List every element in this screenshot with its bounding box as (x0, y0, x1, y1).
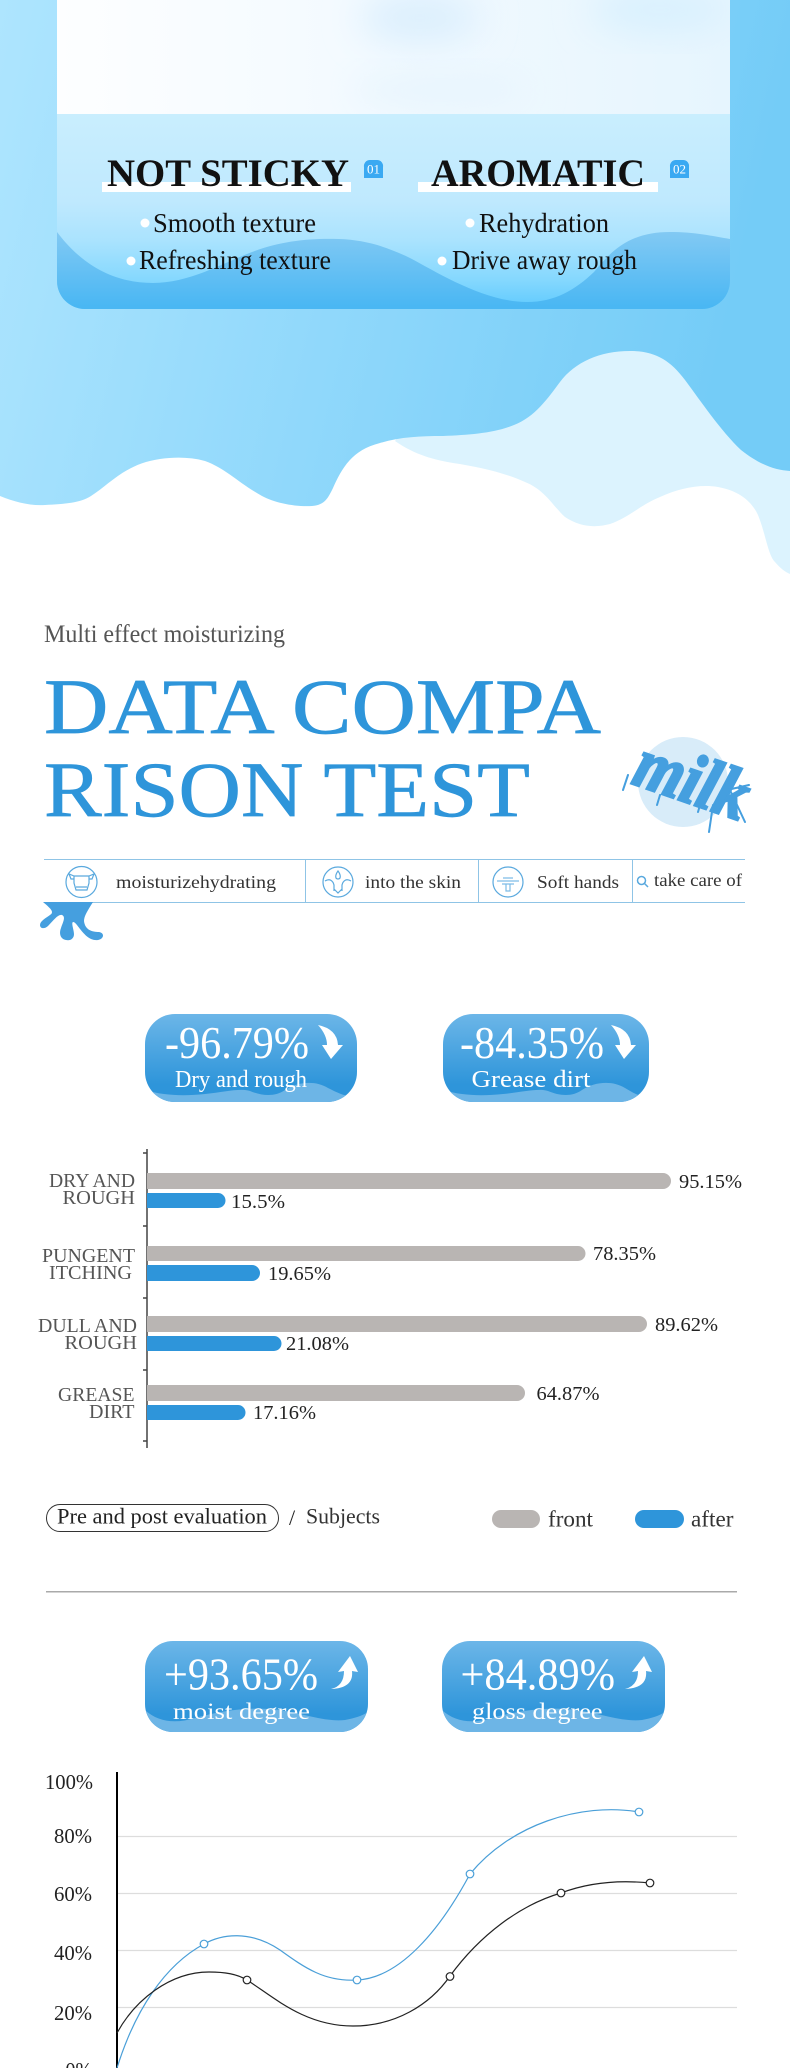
stat pill: grease dirt: Grease dirt (472, 1067, 591, 1093)
badge 01 (364, 160, 383, 178)
stat pill: moist degree (145, 1641, 368, 1732)
icon: cow (66, 866, 97, 898)
arrow down (611, 1025, 636, 1059)
label: moisturize: moisturizehydrating (116, 872, 276, 892)
product card (57, 0, 730, 309)
y axis (116, 1772, 118, 2068)
group: dull and rough: DULL AND (38, 1315, 137, 1337)
group: dry and rough: 95.15% (679, 1171, 742, 1193)
axis (143, 1149, 147, 1448)
list: aromatic benefits (438, 208, 637, 275)
icon: skin drop (323, 867, 353, 897)
stat pill: moist degree: +93.65% (164, 1650, 318, 1700)
legend (492, 1506, 734, 1532)
y labels: 20% (54, 2001, 92, 2025)
bar chart (38, 1149, 742, 1448)
badge 02: 02 (673, 162, 686, 176)
section subtitle: Multi effect moisturizing (44, 621, 285, 648)
group: pungent itching: PUNGENT (42, 1245, 135, 1267)
group: pungent itching (42, 1243, 656, 1285)
stat pill: gloss degree: gloss degree (472, 1699, 602, 1724)
evaluation label: / (289, 1505, 296, 1530)
heading: aromatic: AROMATIC (431, 152, 645, 195)
stat pill: gloss degree: +84.89% (460, 1650, 615, 1700)
stat pill: dry and rough (145, 1014, 357, 1102)
stat pill: moist degree: moist degree (173, 1699, 310, 1724)
group: dry and rough: DRY AND (49, 1170, 135, 1192)
milk splash (40, 902, 103, 940)
group: dry and rough: ROUGH (62, 1187, 135, 1209)
section title: DATA COMPA (44, 663, 601, 750)
list: not sticky benefits (126, 208, 331, 275)
group: pungent itching: 19.65% (268, 1263, 331, 1285)
stat pill: gloss degree (442, 1641, 665, 1732)
group: dull and rough (38, 1314, 718, 1355)
y labels: 80% (54, 1824, 92, 1848)
group: grease dirt: GREASE (58, 1384, 134, 1406)
card waves (57, 232, 730, 309)
group: grease dirt: 64.87% (536, 1383, 600, 1405)
group: grease dirt (58, 1383, 600, 1424)
card lower panel (57, 114, 730, 309)
feature strip (44, 859, 745, 902)
y labels: 60% (54, 1882, 92, 1906)
arrow down (318, 1025, 343, 1059)
arrow up (625, 1656, 652, 1689)
section title (44, 663, 601, 833)
label: take care of: take care of (654, 870, 742, 890)
badge 01: 01 (367, 162, 380, 176)
list: not sticky benefits: Smooth texture (153, 208, 316, 238)
list: aromatic benefits: Drive away rough (452, 245, 637, 275)
arrow up (331, 1656, 358, 1689)
list: not sticky benefits: Refreshing texture (139, 245, 331, 275)
section title: RISON TEST (44, 746, 530, 833)
line chart (45, 1770, 737, 2068)
list: aromatic benefits: Rehydration (479, 208, 609, 238)
card photo area (57, 0, 730, 114)
y labels: 100% (45, 1770, 93, 1794)
badge 02 (670, 160, 689, 178)
group: pungent itching: ITCHING (49, 1262, 132, 1284)
evaluation label (46, 1504, 380, 1532)
pale wave behind header (395, 300, 790, 574)
y labels (45, 1770, 93, 2068)
stat pill: grease dirt (443, 1014, 649, 1102)
heading: not sticky: NOT STICKY (107, 152, 349, 195)
stat pill: grease dirt: -84.35% (460, 1017, 604, 1068)
series: after (117, 1808, 643, 2068)
stat pill: dry and rough: Dry and rough (175, 1067, 307, 1093)
icon: search (638, 876, 648, 887)
icon: hands (493, 867, 523, 897)
group: dry and rough: 15.5% (231, 1191, 285, 1213)
stat pill: dry and rough: -96.79% (165, 1017, 309, 1068)
legend: after (691, 1506, 734, 1532)
evaluation label: Pre and post evaluation (57, 1504, 267, 1528)
y labels: 40% (54, 1941, 92, 1965)
group: grease dirt: 17.16% (253, 1402, 316, 1424)
group: grease dirt: DIRT (89, 1401, 134, 1423)
label: into the skin: into the skin (365, 872, 461, 892)
label: soft hands: Soft hands (537, 872, 619, 892)
legend: front (548, 1506, 594, 1532)
group: pungent itching: 78.35% (593, 1243, 656, 1265)
group: dull and rough: 21.08% (286, 1333, 349, 1355)
group: dull and rough: ROUGH (64, 1332, 137, 1354)
evaluation label: Subjects (306, 1504, 380, 1528)
group: dry and rough (49, 1170, 742, 1213)
milk logo: milk (625, 722, 761, 836)
header blue wave background (0, 0, 790, 506)
group: dull and rough: 89.62% (655, 1314, 718, 1336)
series: before (117, 1879, 654, 2033)
